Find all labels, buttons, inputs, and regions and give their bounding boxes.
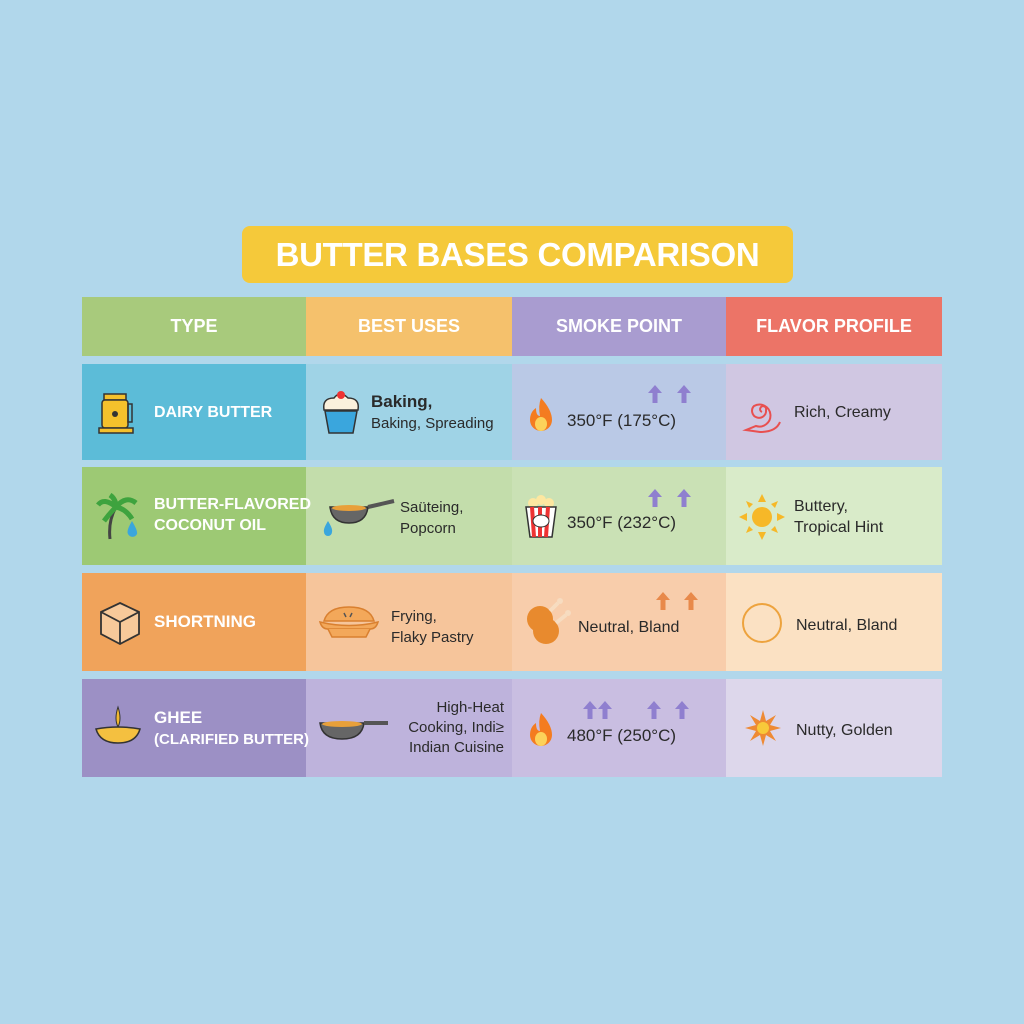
icon: swirl	[742, 404, 781, 433]
arrows	[648, 489, 691, 507]
icon: flame	[530, 398, 552, 431]
arrows	[656, 592, 698, 610]
flavor text: Rich, Creamy	[794, 404, 891, 421]
uses text: High-Heat	[436, 699, 504, 716]
uses text: Cooking, Indi≥	[408, 719, 504, 736]
smoke text: 480°F (250°C)	[567, 726, 676, 745]
title: BUTTER BASES COMPARISON	[276, 236, 759, 272]
flavor text: Buttery,	[794, 498, 848, 515]
row: shortening	[82, 573, 942, 671]
icon: palm tree with drop	[96, 493, 138, 540]
icon: flame	[530, 713, 552, 746]
icon: cube	[100, 602, 140, 645]
icon: frying pan	[319, 721, 388, 740]
title	[242, 226, 793, 283]
uses text: Indian Cuisine	[409, 739, 504, 756]
header: type: TYPE	[170, 316, 218, 336]
smoke text: 350°F (232°C)	[567, 513, 676, 532]
type label: (CLARIFIED BUTTER)	[154, 731, 309, 748]
row: dairy butter	[82, 364, 942, 460]
uses text: Flaky Pastry	[391, 629, 474, 646]
type label	[154, 496, 311, 534]
flavor text: Nutty, Golden	[796, 722, 893, 739]
row: coconut oil	[82, 467, 942, 565]
flavor text: Tropical Hint	[794, 519, 883, 536]
type label: DAIRY BUTTER	[154, 404, 272, 421]
uses text: Frying,	[391, 608, 437, 625]
icon: wok with drop	[324, 499, 394, 536]
type label: BUTTER-FLAVORED	[154, 496, 311, 513]
row: ghee	[82, 679, 942, 777]
icon: circle	[742, 603, 782, 643]
arrows	[648, 385, 691, 403]
uses text	[408, 699, 504, 756]
uses text: Baking, Spreading	[371, 415, 494, 432]
icon: pie	[319, 606, 379, 638]
type label: GHEE	[154, 708, 202, 727]
flavor text	[794, 498, 884, 536]
icon: chicken legs	[527, 598, 571, 644]
smoke text: 350°F (175°C)	[567, 411, 676, 430]
type label: SHORTNING	[154, 612, 256, 631]
icon: ghee lamp	[95, 706, 141, 744]
icon: sun	[739, 494, 785, 540]
type label	[154, 708, 309, 748]
flavor text: Neutral, Bland	[796, 617, 897, 634]
icon: cupcake	[323, 391, 359, 434]
uses text: Popcorn	[400, 520, 456, 537]
header: best uses: BEST USES	[358, 316, 460, 336]
smoke text: Neutral, Bland	[578, 619, 679, 636]
header: type	[82, 297, 306, 356]
uses text	[371, 392, 494, 432]
uses text: Baking,	[371, 392, 432, 411]
header: flavor profile: FLAVOR PROFILE	[756, 316, 912, 336]
icon: popcorn	[525, 495, 557, 538]
uses text	[400, 499, 463, 537]
uses text: Saüteing,	[400, 499, 463, 516]
type label: COCONUT OIL	[154, 517, 266, 534]
header: smoke point	[512, 297, 726, 356]
icon: star sun	[745, 710, 781, 746]
uses text	[391, 608, 474, 646]
icon: butter churn	[98, 393, 134, 434]
arrows	[583, 701, 689, 719]
header: smoke point: SMOKE POINT	[556, 316, 682, 336]
header: best uses	[306, 297, 512, 356]
header row	[82, 297, 942, 356]
header: flavor profile	[726, 297, 942, 356]
